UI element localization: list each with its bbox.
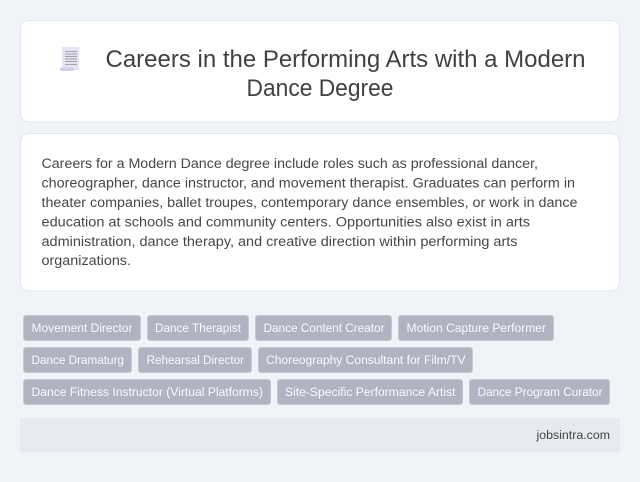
- text block: description: administration, dance therapy, and creative direction within performing arts: [42, 234, 518, 250]
- text block: description: theater companies, ballet troupes, contemporary dance ensembles, or work in dance: [42, 195, 578, 211]
- title: [106, 46, 586, 102]
- tag: Dance Fitness Instructor (Virtual Platforms): [32, 385, 263, 399]
- tag: Choreography Consultant for Film/TV: [266, 353, 466, 367]
- tag: Movement Director: [32, 321, 132, 335]
- title: Careers in the Performing Arts with a Modern: [106, 46, 586, 73]
- text block: description: choreographer, dance instructor, and movement therapist. Graduates can perform in: [42, 176, 575, 192]
- tag: [24, 316, 140, 340]
- tag: [148, 316, 248, 340]
- footer text: jobsintra.com: [536, 428, 610, 442]
- text block: description: education at schools and community centers. Opportunities also exist in arts: [42, 214, 530, 230]
- tag: Dance Program Curator: [478, 385, 602, 399]
- text block: description: [42, 156, 578, 269]
- tag: Motion Capture Performer: [406, 321, 546, 335]
- tag: [398, 316, 554, 340]
- text block: description: Careers for a Modern Dance degree include roles such as professional dancer,: [42, 156, 538, 172]
- tag: [258, 348, 472, 372]
- tag: Dance Dramaturg: [32, 353, 124, 367]
- tag: [278, 380, 462, 404]
- tag: [138, 348, 252, 372]
- tag: Dance Therapist: [155, 321, 242, 335]
- panel: header card: [20, 20, 620, 122]
- icon: paper scroll: [60, 47, 79, 71]
- tag: [256, 316, 392, 340]
- panel: career tags: [24, 316, 610, 404]
- tag: Site-Specific Performance Artist: [285, 385, 456, 399]
- panel: description card: [20, 134, 620, 291]
- tag: [470, 380, 610, 404]
- tag: [24, 348, 132, 372]
- tag: Dance Content Creator: [264, 321, 384, 335]
- tag: [24, 380, 270, 404]
- footer bar: [20, 418, 620, 452]
- tag: Rehearsal Director: [146, 353, 244, 367]
- text block: description: organizations.: [42, 253, 131, 269]
- title: Dance Degree: [246, 75, 394, 102]
